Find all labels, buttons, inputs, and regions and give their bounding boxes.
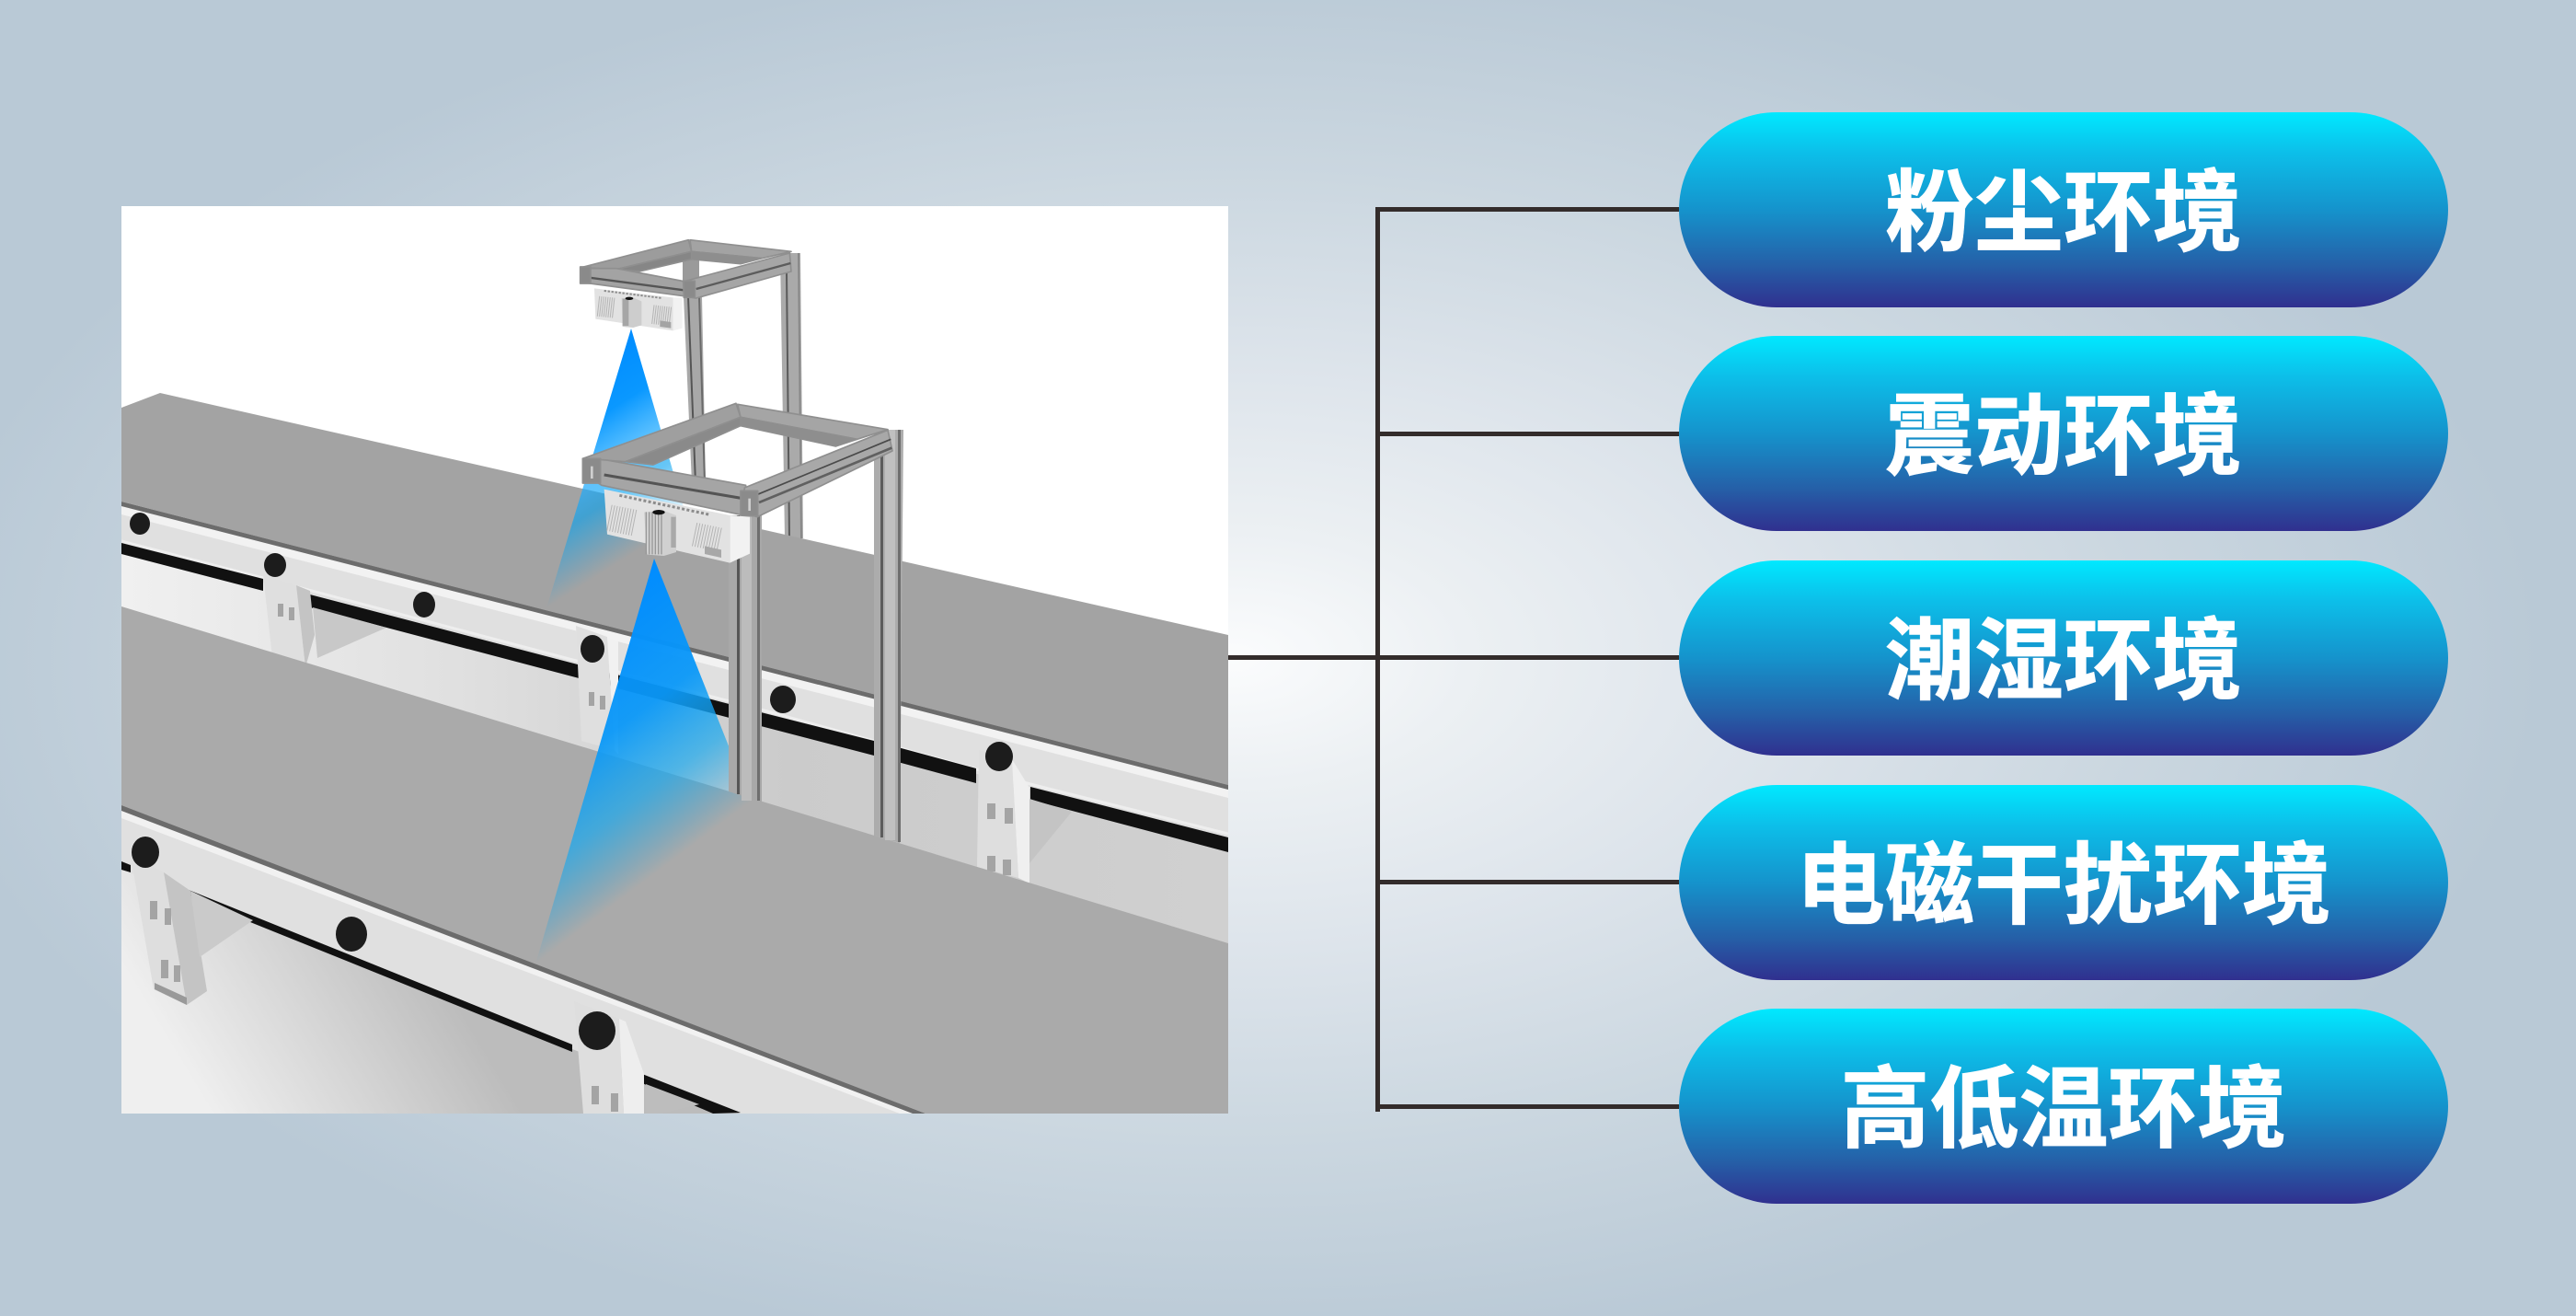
rear belt frame rail bbox=[121, 502, 1228, 839]
rear laser beam bbox=[546, 329, 687, 608]
front conveyor belt top surface bbox=[121, 606, 1228, 1114]
front belt legs bbox=[131, 856, 699, 1114]
rear conveyor belt top surface bbox=[121, 393, 1228, 786]
rear frame top ring bbox=[581, 240, 791, 298]
white studio backdrop bbox=[121, 206, 1228, 1114]
pill: electromagnetic interference environment: 电磁干扰环境 bbox=[1796, 836, 2331, 936]
rear frame uprights bbox=[683, 253, 803, 538]
pill: dust environment: 粉尘环境 bbox=[1885, 163, 2242, 263]
front laser beam bbox=[535, 559, 751, 964]
pill: humid environment: 潮湿环境 bbox=[1885, 611, 2242, 711]
pill: dust environment bbox=[1679, 112, 2448, 307]
pill: vibration environment: 震动环境 bbox=[1885, 387, 2242, 487]
rear belt legs bbox=[263, 575, 1072, 883]
pill: high and low temperature environment: 高低温环境 bbox=[1840, 1059, 2287, 1160]
rear sensor unit bbox=[594, 288, 683, 330]
pill: electromagnetic interference environment bbox=[1679, 785, 2448, 980]
front floor bbox=[121, 856, 791, 1114]
pill: humid environment bbox=[1679, 560, 2448, 756]
front belt knobs bbox=[132, 837, 615, 1050]
floor between belts bbox=[121, 543, 1228, 957]
rear belt knobs bbox=[130, 513, 1013, 771]
front belt black slot bbox=[121, 861, 741, 1114]
front frame uprights bbox=[729, 430, 903, 843]
front belt frame rail bbox=[121, 805, 926, 1114]
pill: high and low temperature environment bbox=[1679, 1009, 2448, 1204]
front frame top ring bbox=[582, 403, 892, 517]
connector lines: trunk and branches bbox=[1228, 207, 1679, 1112]
front sensor unit bbox=[604, 490, 750, 563]
rear belt black slot bbox=[121, 543, 1228, 852]
pill: vibration environment bbox=[1679, 336, 2448, 531]
illustration panel: dual laser sensors above conveyor belts bbox=[121, 206, 1228, 1114]
